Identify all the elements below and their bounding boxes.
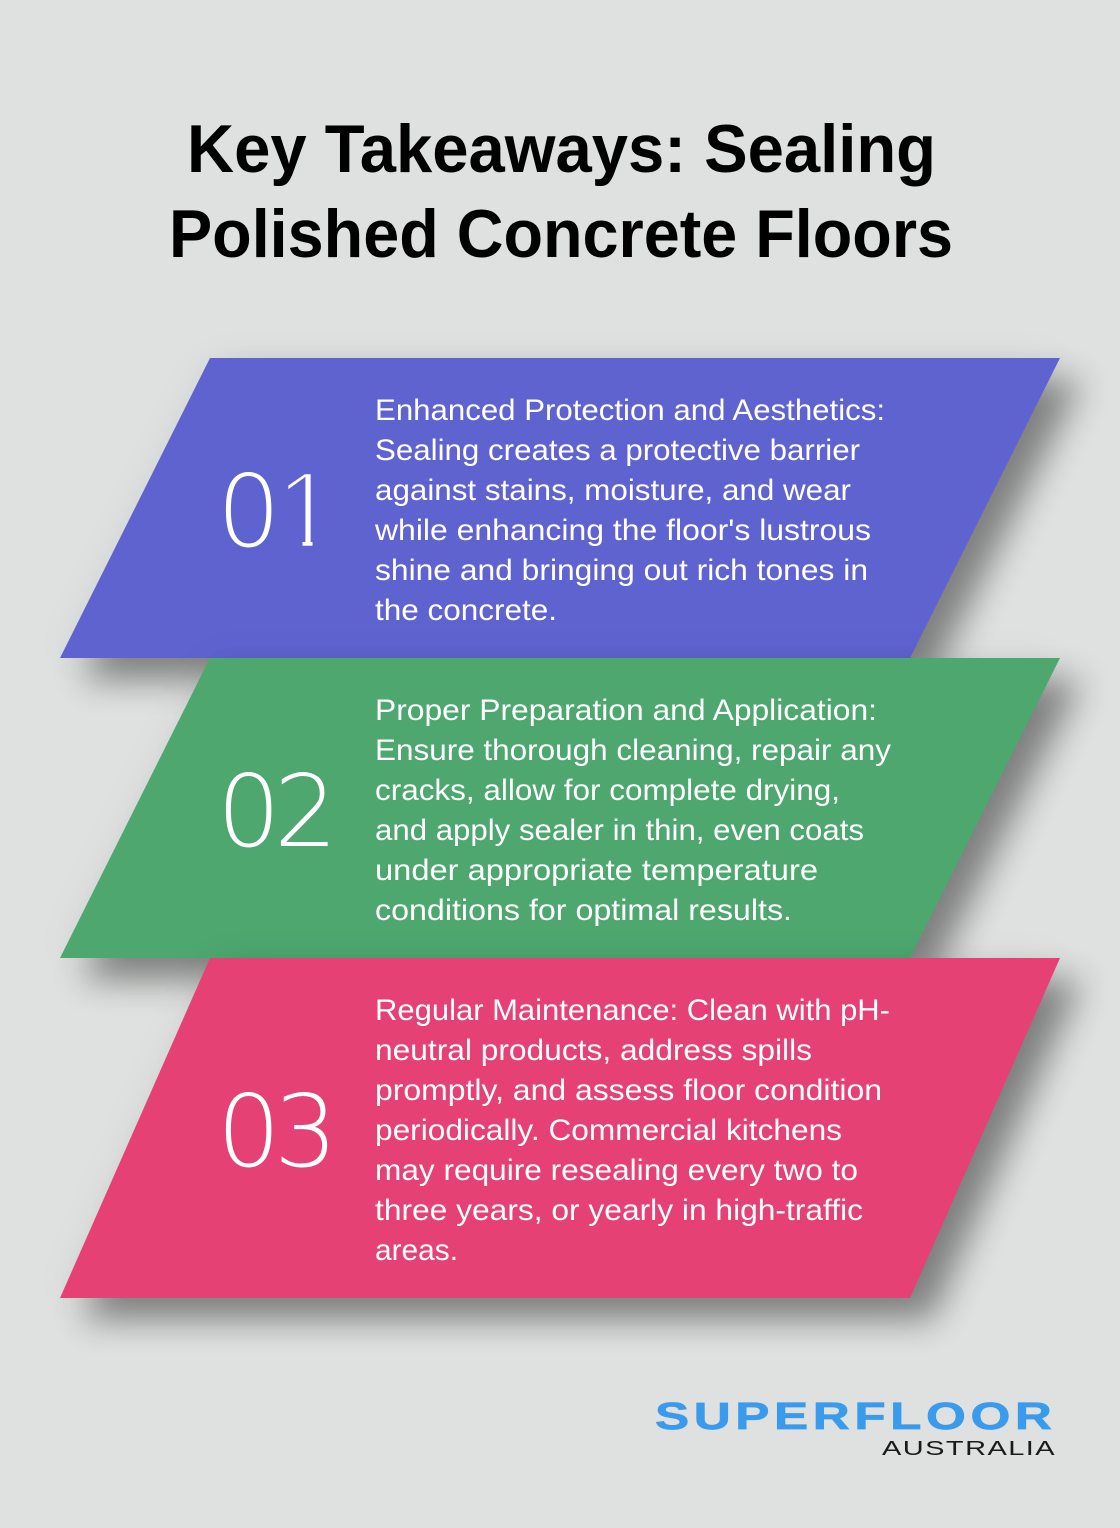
text: proper preparation and application: under appropriate temperature — [375, 854, 818, 887]
text: regular maintenance: three years, or yearly in high-traffic — [375, 1194, 863, 1227]
logo: Superfloor Australia: AUSTRALIA — [882, 1437, 1056, 1460]
text: enhanced protection and aesthetics: the concrete. — [375, 594, 557, 627]
logo: Superfloor Australia: SUPERFLOOR — [655, 1394, 1056, 1437]
panel: takeaway 02 — [60, 658, 1082, 980]
panel: takeaway 03 — [60, 958, 1082, 1320]
number 03: 03 — [217, 1073, 338, 1190]
text: regular maintenance: may require resealing every two to — [375, 1154, 858, 1187]
title — [169, 111, 953, 272]
logo: Superfloor Australia — [655, 1394, 1056, 1460]
text: enhanced protection and aesthetics — [374, 394, 885, 627]
text: proper preparation and application — [375, 694, 891, 927]
text: regular maintenance: areas. — [375, 1234, 458, 1267]
text: enhanced protection and aesthetics: against stains, moisture, and wear — [375, 474, 851, 507]
text: enhanced protection and aesthetics: shine and bringing out rich tones in — [375, 554, 868, 587]
text: regular maintenance: Regular Maintenance: Clean with pH- — [375, 994, 890, 1027]
text: proper preparation and application: conditions for optimal results. — [375, 894, 792, 927]
number 01: 1 — [276, 449, 337, 572]
text: enhanced protection and aesthetics: while enhancing the floor's lustrous — [374, 514, 871, 547]
text: proper preparation and application: Ensure thorough cleaning, repair any — [375, 734, 891, 767]
number 02: 02 — [217, 753, 338, 870]
text: proper preparation and application: cracks, allow for complete drying, — [375, 774, 840, 807]
text: regular maintenance: neutral products, address spills — [375, 1034, 812, 1067]
text: regular maintenance — [375, 994, 890, 1267]
title: Polished Concrete Floors — [169, 196, 953, 272]
text: proper preparation and application: and apply sealer in thin, even coats — [375, 814, 864, 847]
panel: takeaway 01 — [60, 358, 1082, 680]
number 01: 0 — [217, 453, 281, 570]
text: enhanced protection and aesthetics: Enhanced Protection and Aesthetics: — [375, 394, 885, 427]
title: Key Takeaways: Sealing — [187, 111, 936, 187]
text: regular maintenance: promptly, and assess floor condition — [375, 1074, 882, 1107]
text: enhanced protection and aesthetics: Sealing creates a protective barrier — [375, 434, 860, 467]
text: proper preparation and application: Proper Preparation and Application: — [375, 694, 877, 727]
number 01 — [226, 472, 312, 548]
text: regular maintenance: periodically. Commercial kitchens — [375, 1114, 842, 1147]
